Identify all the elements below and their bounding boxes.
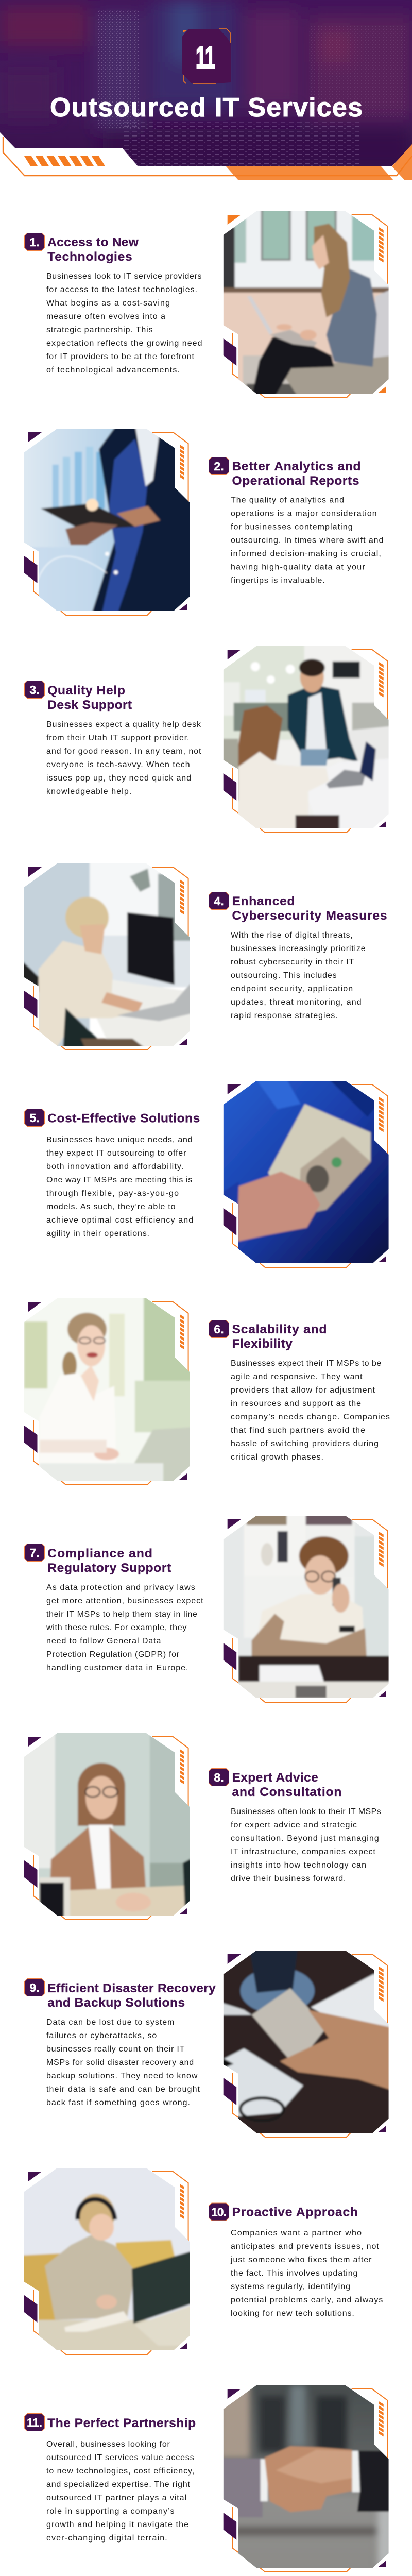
text block 8 <box>231 1807 381 1883</box>
text block 1: strategic partnership. This <box>46 326 153 334</box>
text block 11: to new technologies, cost efficiency, <box>46 2467 194 2476</box>
text block 2: operations is a major consideration <box>231 509 377 518</box>
header accent: orange band <box>226 166 393 180</box>
text block 7: Protection Regulation (GDPR) for <box>46 1650 180 1659</box>
number badge 3 <box>25 681 44 699</box>
heading 6: Scalability and <box>232 1323 327 1336</box>
image 9: hand holding external hard drive <box>219 1946 394 2137</box>
text block 2: informed decision-making is crucial, <box>231 549 381 558</box>
text block 7: with these rules. For example, they <box>46 1623 186 1632</box>
number badge: 11 <box>196 40 215 75</box>
text block 2: for businesses contemplating <box>231 522 353 532</box>
heading 10: Proactive Approach <box>232 2205 358 2219</box>
text block 4: endpoint security, application <box>231 985 353 993</box>
text block 11: and specialized expertise. The right <box>46 2480 191 2489</box>
number badge 10: 10. <box>211 2205 227 2218</box>
image 11: handshake <box>219 2381 394 2572</box>
number badge 2: 2. <box>214 460 224 473</box>
text block 1: for IT providers to be at the forefront <box>46 352 195 361</box>
number badge 1: 1. <box>29 235 40 249</box>
text block 2: The quality of analytics and <box>231 496 344 505</box>
text block 11: Overall, businesses looking for <box>46 2440 170 2449</box>
number badge <box>182 29 231 84</box>
text block 8: drive their business forward. <box>231 1874 346 1883</box>
text block 7 <box>46 1583 203 1672</box>
text block 4: businesses increasingly prioritize <box>231 944 366 953</box>
text block 1: Businesses look to IT service providers <box>46 272 202 281</box>
text block 5: models. As such, they’re able to <box>46 1202 176 1211</box>
text block 11: outsourced IT services value access <box>46 2453 194 2462</box>
text block 5: through flexible, pay-as-you-go <box>46 1189 179 1198</box>
text block 6: hassle of switching providers during <box>231 1439 379 1448</box>
number badge 2 <box>209 457 229 475</box>
heading 4: Enhanced <box>232 894 295 908</box>
text block 11: growth and helping it navigate the <box>46 2520 188 2529</box>
heading 6: Flexibility <box>232 1337 293 1351</box>
number badge 10 <box>209 2203 229 2221</box>
text block 9: failures or cyberattacks, so <box>46 2031 157 2040</box>
header accent: hatch stripes <box>24 156 105 166</box>
text block 10: anticipates and prevents issues, not <box>231 2242 379 2251</box>
panel 2: Better Analytics and Operational Reports <box>20 425 383 615</box>
image 5: hand holding dollar bills <box>219 1077 394 1267</box>
text block 3 <box>46 720 201 796</box>
text block 11: role in supporting a company’s <box>46 2507 174 2516</box>
panel 1: Access to New Technologies <box>25 207 394 398</box>
heading 6 <box>232 1323 327 1351</box>
text block 3: everyone is tech-savvy. When tech <box>46 760 190 769</box>
heading 1: Technologies <box>47 250 132 264</box>
panel 4: Enhanced Cybersecurity Measures <box>20 859 387 1050</box>
image 7: woman on the phone taking notes <box>219 1512 394 1702</box>
heading 2: Operational Reports <box>232 474 359 488</box>
number badge 5 <box>25 1109 44 1126</box>
text block 9: businesses really count on their IT <box>46 2045 185 2054</box>
text block 8: for expert advice and strategic <box>231 1821 357 1829</box>
text block 8: IT infrastructure, companies expect <box>231 1848 376 1856</box>
text block 7: need to follow General Data <box>46 1637 161 1646</box>
text block 10: just someone who fixes them after <box>230 2256 372 2264</box>
image 4: woman typing at a desk <box>20 859 198 1050</box>
text block 2: having high-quality data at your <box>231 563 365 572</box>
text block 5: One way IT MSPs are meeting this is <box>46 1176 192 1184</box>
heading 11: The Perfect Partnership <box>47 2416 196 2430</box>
text block 3: from their Utah IT support provider, <box>46 734 190 742</box>
text block 10: potential problems early, and always <box>231 2296 383 2304</box>
heading 7 <box>47 1547 171 1575</box>
text block 4: updates, threat monitoring, and <box>231 998 362 1007</box>
text block 6: agile and responsive. They want <box>231 1372 363 1381</box>
header accent: corner shape <box>392 144 412 180</box>
number badge 9: 9. <box>29 1981 40 1994</box>
header accent: frame line <box>3 137 412 176</box>
heading 5: Cost-Effective Solutions <box>47 1112 200 1125</box>
heading 3: Desk Support <box>47 698 132 712</box>
image 1: woman with laptop by window <box>219 207 394 398</box>
number badge 8: 8. <box>214 1771 224 1784</box>
text block 1: of technological advancements. <box>46 366 180 375</box>
heading 2: Better Analytics and <box>232 460 360 473</box>
header <box>0 0 412 180</box>
text block 7: get more attention, businesses expect <box>46 1597 203 1605</box>
text block 9: Data can be lost due to system <box>46 2018 174 2027</box>
text block 5: agility in their operations. <box>46 1229 149 1238</box>
panel 8: Expert Advice and Consultation <box>20 1729 381 1920</box>
text block 10 <box>230 2229 383 2318</box>
text block 3: issues pop up, they need quick and <box>46 774 191 783</box>
text block 6 <box>231 1359 390 1462</box>
heading 3 <box>47 684 132 712</box>
heading 8 <box>232 1771 341 1799</box>
text block 1 <box>46 272 202 375</box>
text block 9: backup solutions. They need to know <box>46 2072 198 2080</box>
number badge 7: 7. <box>29 1546 40 1560</box>
text block 3: Businesses expect a quality help desk <box>46 720 201 729</box>
number badge 4 <box>209 892 229 910</box>
text block 2: outsourcing. In times where swift and <box>231 536 383 545</box>
text block 6: critical growth phases. <box>231 1453 323 1462</box>
number badge 11: 11. <box>27 2416 42 2429</box>
text block 6: in resources and support as the <box>231 1399 361 1408</box>
text block 6: Businesses expect their IT MSPs to be <box>231 1359 381 1368</box>
panel 3: Quality Help Desk Support <box>25 642 394 833</box>
text block 2 <box>231 496 383 585</box>
heading 8: Expert Advice <box>232 1771 318 1785</box>
text block 8: consultation. Beyond just managing <box>231 1834 379 1843</box>
number badge 11 <box>25 2413 44 2431</box>
heading 8: and Consultation <box>232 1785 341 1799</box>
number badge 3: 3. <box>29 683 40 697</box>
number badge 8 <box>209 1768 229 1786</box>
heading 4: Cybersecurity Measures <box>232 909 387 923</box>
text block 9: their data is safe and can be brought <box>46 2085 200 2094</box>
text block 9 <box>46 2018 200 2107</box>
heading 3: Quality Help <box>47 684 125 698</box>
text block 6: providers that allow for adjustment <box>231 1386 375 1395</box>
text block 3: knowledgeable help. <box>46 787 131 796</box>
heading 9 <box>47 1981 216 2010</box>
text block 7: handling customer data in Europe. <box>46 1664 188 1672</box>
panel 7: Compliance and Regulatory Support <box>25 1512 394 1702</box>
heading 2 <box>232 460 360 488</box>
text block 8: Businesses often look to their IT MSPs <box>231 1807 381 1816</box>
heading 7: Regulatory Support <box>47 1561 171 1575</box>
number badge 7 <box>25 1544 44 1561</box>
text block 6: that find such partners avoid the <box>231 1426 365 1435</box>
text block 11: outsourced IT partner plays a vital <box>46 2494 186 2502</box>
text block 10: Companies want a partner who <box>231 2229 362 2238</box>
heading 1 <box>47 235 139 264</box>
image 6: smiling woman in white blouse <box>20 1294 195 1485</box>
text block 5 <box>46 1136 193 1238</box>
image 8: woman in brown blazer at a desk <box>20 1729 196 1920</box>
text block 9: back fast if something goes wrong. <box>46 2098 190 2107</box>
heading 9: and Backup Solutions <box>47 1996 185 2010</box>
text block 10: looking for new tech solutions. <box>231 2309 354 2318</box>
text block 6: company’s needs change. Companies <box>231 1413 390 1421</box>
text block 11 <box>46 2440 194 2543</box>
text block 3: and for good reason. In any team, not <box>46 747 201 756</box>
text block 8: insights into how technology can <box>231 1861 366 1870</box>
number badge 9 <box>25 1978 44 1996</box>
text block 1: for access to the latest technologies. <box>46 285 197 294</box>
number badge 4: 4. <box>214 894 224 908</box>
heading 9: Efficient Disaster Recovery <box>47 1981 216 1995</box>
panel 10: Proactive Approach <box>20 2164 383 2356</box>
text block 1: What begins as a cost-saving <box>46 299 170 308</box>
text block 4: robust cybersecurity in their IT <box>231 958 354 967</box>
text block 1: expectation reflects the growing need <box>46 339 202 348</box>
panel 11: The Perfect Partnership <box>25 2381 394 2572</box>
text block 4: rapid response strategies. <box>231 1011 338 1020</box>
number badge 1 <box>25 233 44 250</box>
number badge 6 <box>209 1320 229 1337</box>
text block 5: they expect IT outsourcing to offer <box>46 1149 186 1158</box>
text block 4: With the rise of digital threats, <box>231 931 353 940</box>
header background: data-center photo <box>0 0 412 170</box>
text block 10: systems regularly, identifying <box>231 2282 350 2291</box>
text block 7: their IT MSPs to help them stay in line <box>46 1610 197 1619</box>
heading 7: Compliance and <box>47 1547 152 1561</box>
heading 4 <box>232 894 387 923</box>
text block 11: ever-changing digital terrain. <box>46 2534 167 2543</box>
heading 1: Access to New <box>47 235 139 249</box>
text block 5: achieve optimal cost efficiency and <box>46 1216 193 1225</box>
panel 9: Efficient Disaster Recovery and Backup Solutions <box>25 1946 394 2137</box>
image 2: businessman with tablet and charts <box>20 425 195 615</box>
text block 7: As data protection and privacy laws <box>46 1583 195 1592</box>
text block 9: MSPs for solid disaster recovery and <box>46 2058 194 2067</box>
text block 4 <box>231 931 366 1020</box>
text block 10: the fact. This involves updating <box>231 2269 357 2278</box>
image 3: two colleagues at a laptop <box>219 642 394 833</box>
number badge 5: 5. <box>29 1111 40 1125</box>
number badge 6: 6. <box>214 1323 224 1336</box>
text block 4: outsourcing. This includes <box>231 971 337 980</box>
panel 5: Cost-Effective Solutions <box>25 1077 394 1267</box>
text block 1: measure often evolves into a <box>46 312 165 321</box>
panel 6: Scalability and Flexibility <box>20 1294 390 1485</box>
text block 5: Businesses have unique needs, and <box>46 1136 193 1144</box>
image 10: woman with headphones and laptop on a sofa <box>20 2164 195 2356</box>
text block 2: fingertips is invaluable. <box>231 576 325 585</box>
text block 5: both innovation and affordability. <box>46 1162 183 1171</box>
title: Outsourced IT Services <box>50 93 363 123</box>
